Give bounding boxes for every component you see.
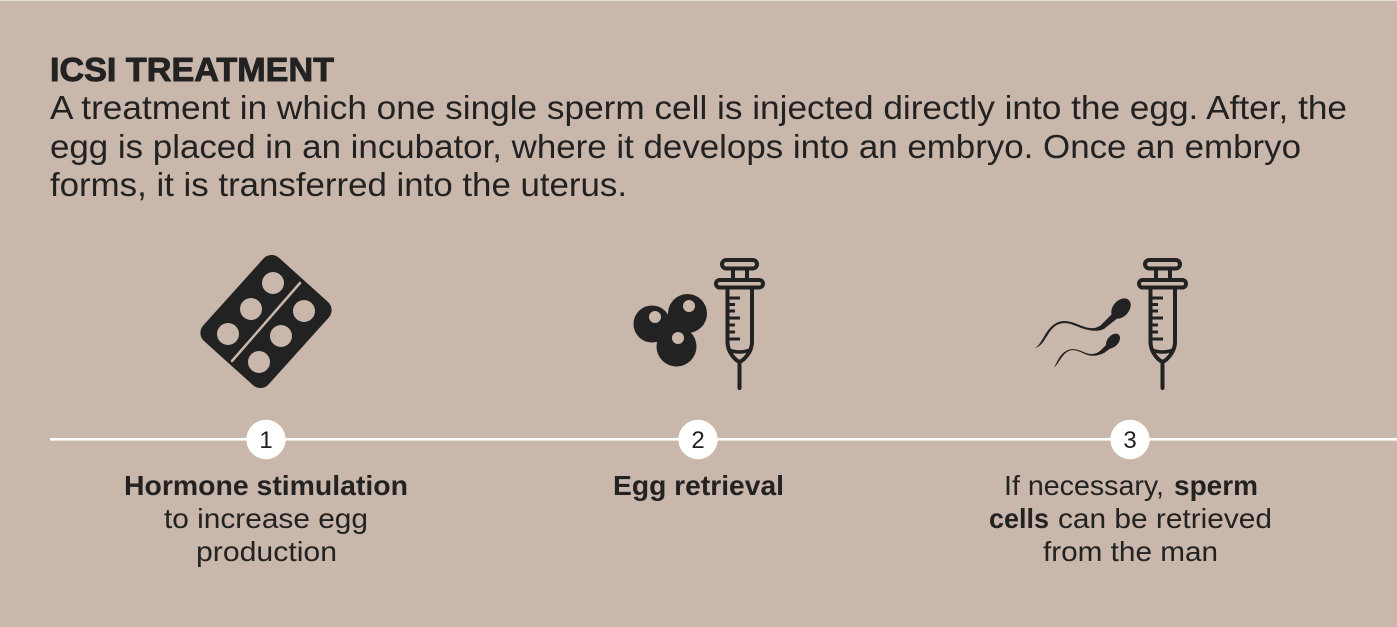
step 1 text: to increase egg <box>164 503 368 534</box>
step 3 text: from the man <box>1043 536 1218 567</box>
step 3 text: cells <box>989 503 1049 534</box>
step 2 marker: 2 <box>691 427 705 454</box>
icon: sperm cells <box>1035 295 1135 368</box>
step 2 text: Egg retrieval <box>613 470 784 501</box>
step 1 text: production <box>196 536 337 567</box>
step 3 text <box>989 470 1272 567</box>
icon: eggs <box>634 294 707 366</box>
intro text: egg is placed in an incubator, where it develops into an embryo. Once an embryo <box>50 128 1301 165</box>
step 1 marker: 1 <box>259 427 273 454</box>
step 1 text <box>124 470 408 567</box>
step 3 marker: 3 <box>1123 427 1137 454</box>
intro text: forms, it is transferred into the uterus. <box>50 166 627 203</box>
step 1 text: Hormone stimulation <box>124 470 408 501</box>
step 1 marker <box>246 420 286 459</box>
icon: syringe for sperm retrieval <box>1139 260 1186 388</box>
step 3 text: sperm <box>1174 470 1258 501</box>
icon: pill blister pack <box>196 250 336 393</box>
step 2 marker <box>678 420 718 459</box>
intro text <box>50 89 1347 203</box>
step 3 marker <box>1110 420 1150 459</box>
step 3 text: If necessary, <box>1004 470 1164 501</box>
timeline <box>50 438 1397 441</box>
intro text: A treatment in which one single sperm cell is injected directly into the egg. After, the <box>50 89 1347 126</box>
step 3 text: can be retrieved <box>1058 503 1272 534</box>
icon: syringe for egg retrieval <box>716 260 763 388</box>
title: ICSI TREATMENT <box>50 51 334 88</box>
